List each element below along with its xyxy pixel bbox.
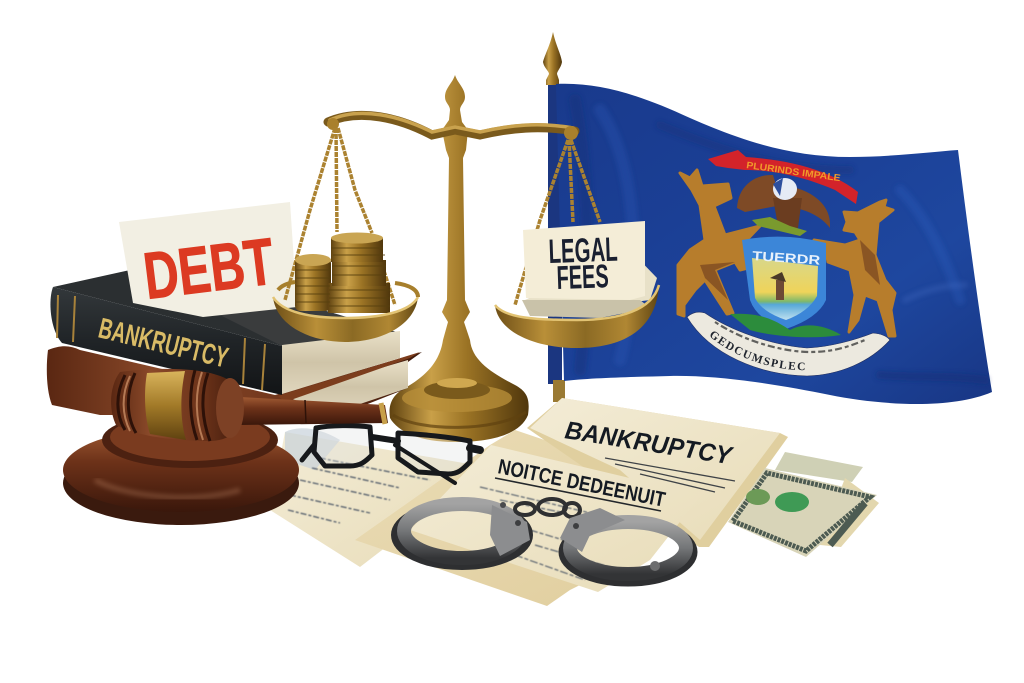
bankruptcy document: BANKRUPTCY bbox=[563, 416, 736, 471]
flag seal: motto ribbon: GEDCUMSPLEC bbox=[710, 332, 804, 370]
notice of default document: NOITCE DEDEENUIT bbox=[496, 455, 667, 512]
legal fees paper stack: LEGAL bbox=[548, 231, 618, 271]
right scale pan bbox=[495, 285, 659, 348]
scale: central column bbox=[390, 75, 529, 442]
flag seal: eagle bbox=[737, 175, 830, 236]
legal fees paper stack bbox=[522, 221, 657, 318]
left scale pan bbox=[273, 282, 418, 342]
glasses bbox=[302, 426, 480, 483]
debt card bbox=[119, 202, 297, 317]
left document under glasses bbox=[270, 428, 475, 567]
cash bbox=[728, 452, 879, 557]
left scale chains bbox=[285, 128, 395, 305]
gavel head bbox=[111, 369, 244, 441]
scale: beam bbox=[327, 113, 578, 140]
left book: top black with title bbox=[50, 270, 400, 395]
flag seal: motto ribbon bbox=[686, 312, 890, 376]
flag seal: banner: PLURINDS IMPALE bbox=[746, 160, 841, 184]
debt card: DEBT bbox=[140, 224, 278, 313]
flag bbox=[556, 84, 992, 404]
flag seal: shield: TUERDR bbox=[752, 248, 821, 268]
flag seal: shield bbox=[742, 237, 826, 329]
handcuffs bbox=[395, 499, 694, 583]
right scale chains bbox=[515, 140, 600, 305]
left book: top black with title: BANKRUPTCY bbox=[95, 313, 231, 375]
bankruptcy document bbox=[527, 398, 788, 547]
gavel handle bbox=[240, 397, 388, 425]
left book: bottom brown bbox=[47, 346, 422, 415]
flag seal: left elk bbox=[678, 170, 760, 316]
gavel sound block bbox=[63, 412, 299, 525]
flag seal: right elk bbox=[814, 200, 895, 336]
notice of default document bbox=[410, 445, 701, 592]
right cuff bbox=[560, 508, 694, 583]
chain bbox=[515, 499, 580, 517]
flag seal: grass bbox=[730, 314, 841, 337]
notice document back sheet bbox=[355, 430, 717, 606]
flag seal: banner bbox=[708, 150, 858, 204]
gold coin stacks bbox=[295, 232, 390, 313]
legal fees paper stack: FEES bbox=[556, 257, 609, 296]
flag pole bbox=[543, 32, 565, 402]
left cuff bbox=[395, 502, 530, 566]
